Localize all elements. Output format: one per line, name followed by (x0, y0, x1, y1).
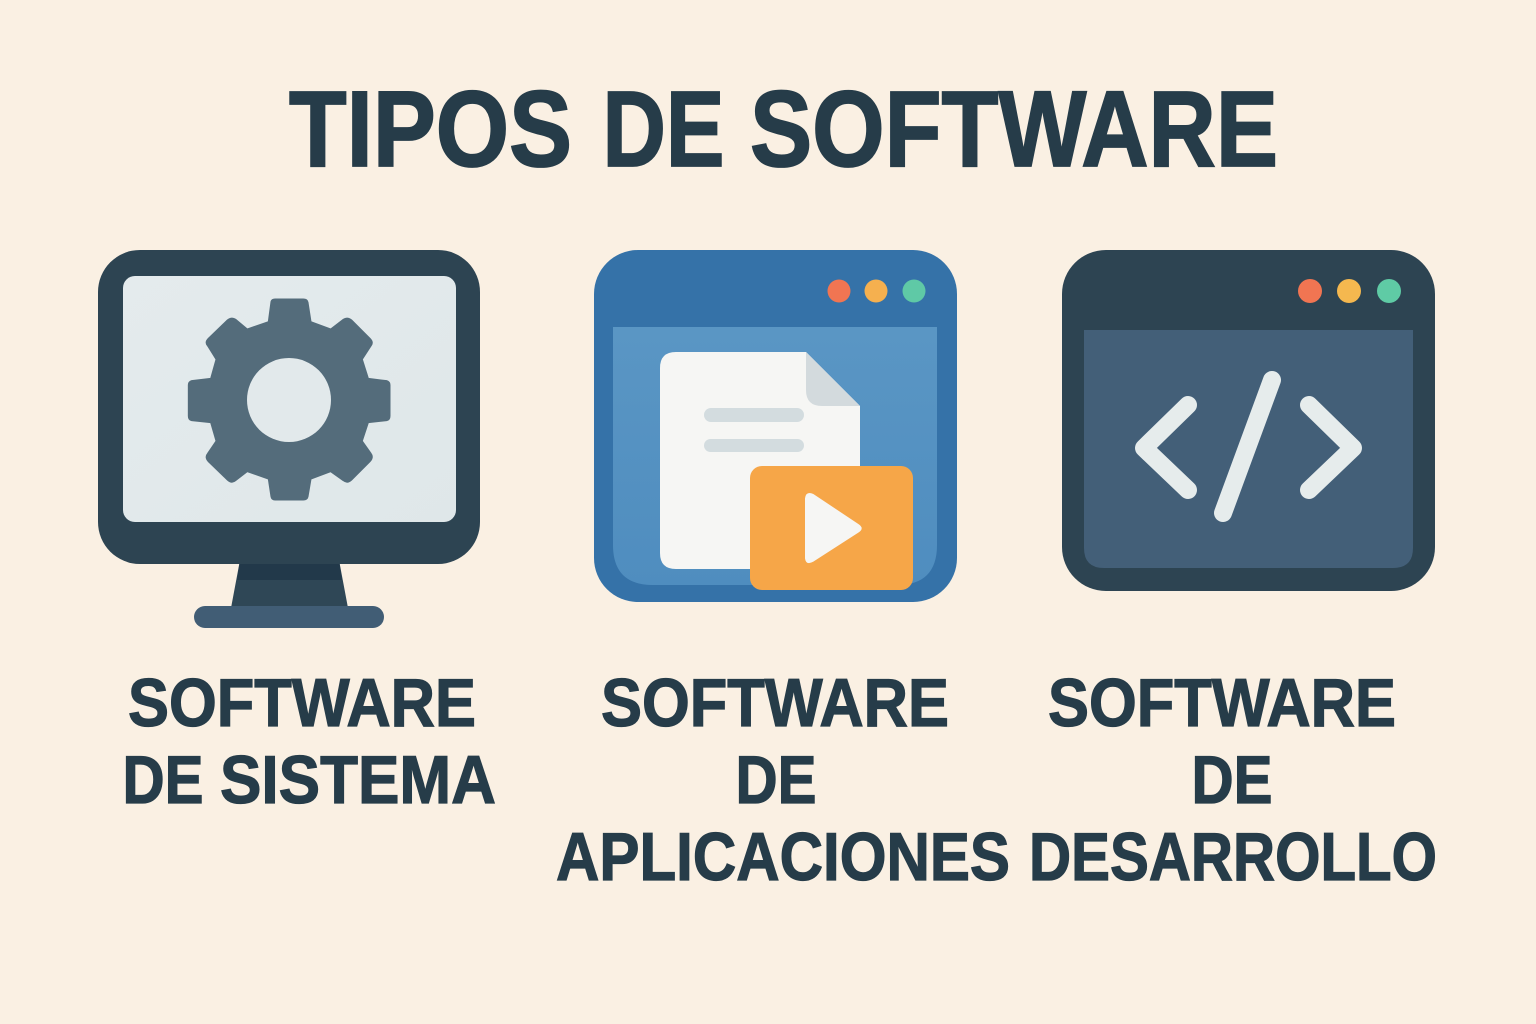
window buttons (1298, 279, 1401, 303)
label: software de aplicaciones: SOFTWARE (601, 665, 949, 741)
label: software de aplicaciones (556, 665, 1010, 895)
label: software de sistema: SOFTWARE (128, 665, 476, 741)
label: software de aplicaciones: APLICACIONES (556, 819, 1010, 895)
label: software de desarrollo (1029, 665, 1437, 895)
title: SOFTWARE (750, 68, 1278, 189)
label: software de sistema (122, 665, 496, 818)
label: software de desarrollo: DE (1192, 742, 1272, 818)
label: software de sistema: DE (122, 742, 204, 818)
label: software de desarrollo: DESARROLLO (1029, 819, 1437, 895)
label: software de aplicaciones: DE (736, 742, 816, 818)
icon: monitor with gear (98, 250, 480, 628)
icon: video play (750, 466, 913, 590)
icon: application window (594, 250, 957, 602)
label: software de desarrollo: SOFTWARE (1048, 665, 1396, 741)
icon: document (660, 352, 860, 569)
icon: gear (188, 299, 390, 500)
title (289, 68, 1278, 189)
title: TIPOS (289, 68, 572, 189)
label: software de sistema: SISTEMA (220, 742, 496, 818)
title: DE (602, 68, 724, 189)
monitor stand (231, 560, 348, 608)
icon: code window (1062, 250, 1435, 591)
window buttons (828, 280, 926, 302)
icon: code brackets (1144, 380, 1353, 513)
